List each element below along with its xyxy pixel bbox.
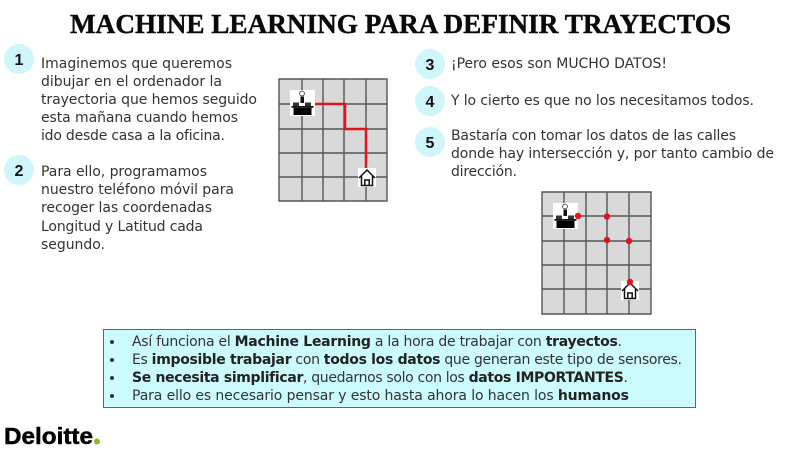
icon: house: [358, 168, 376, 187]
step 5 text: donde hay intersección y, por tanto cambio de: [451, 146, 774, 162]
icon: office: [290, 90, 315, 116]
step 1 text: Imaginemos que queremos: [41, 56, 232, 72]
callout: conclusions: [104, 330, 696, 408]
step 3 text: ¡Pero esos son MUCHO DATOS!: [451, 56, 667, 72]
step 2 badge: [4, 155, 34, 185]
step 5 badge: 5: [426, 135, 435, 152]
step 4 badge: [415, 86, 445, 116]
step 2 text: nuestro teléfono móvil para: [41, 182, 234, 198]
step 2 text: recoger las coordenadas: [41, 200, 212, 216]
step 2 text: Para ello, programamos: [41, 164, 207, 180]
step 2 text: segundo.: [41, 237, 105, 253]
step 5 text: [451, 128, 774, 180]
title: MACHINE LEARNING PARA DEFINIR TRAYECTOS: [70, 9, 731, 39]
step 3 badge: [415, 49, 445, 79]
step 2: [4, 155, 234, 253]
callout: conclusions: Para ello es necesario pensar y esto hasta ahora lo hacen los humanos: [132, 388, 629, 404]
step 5 text: Bastaría con tomar los datos de las calles: [451, 128, 736, 144]
step 2 text: [41, 164, 234, 253]
step 5 text: dirección.: [451, 164, 517, 180]
icon: house: [621, 281, 639, 300]
icon: office: [553, 203, 578, 229]
step 1 badge: 1: [15, 52, 24, 69]
callout: conclusions: Así funciona el Machine Learning a la hora de trabajar con trayectos.: [132, 334, 622, 350]
step 1 text: trayectoria que hemos seguido: [41, 92, 257, 108]
grid map: key points: [542, 192, 651, 314]
red data points: [575, 213, 633, 285]
step 1 text: [41, 56, 257, 144]
step 2 text: Longitud y Latitud cada: [41, 219, 203, 235]
step 3 badge: 3: [426, 57, 435, 74]
step 5 badge: [415, 127, 445, 157]
step 4: [415, 86, 754, 116]
step 2 badge: 2: [15, 163, 24, 180]
step 1 badge: [4, 44, 34, 74]
step 5: [415, 127, 774, 180]
step 4 text: Y lo cierto es que no los necesitamos todos.: [450, 93, 754, 109]
step 1 text: esta mañana cuando hemos: [41, 110, 238, 126]
route line: [313, 104, 366, 170]
step 1: [4, 44, 257, 144]
step 4 badge: 4: [426, 94, 435, 111]
callout: conclusions: Es imposible trabajar con todos los datos que generan este tipo de sensores.: [132, 352, 682, 368]
grid map: full route: [279, 79, 387, 201]
logo: Deloitte: Deloitte: [4, 423, 93, 449]
step 3: [415, 49, 667, 79]
callout: conclusions: Se necesita simplificar, quedarnos solo con los datos IMPORTANTES.: [132, 370, 628, 386]
step 1 text: dibujar en el ordenador la: [41, 74, 222, 90]
step 1 text: ido desde casa a la oficina.: [41, 128, 225, 144]
